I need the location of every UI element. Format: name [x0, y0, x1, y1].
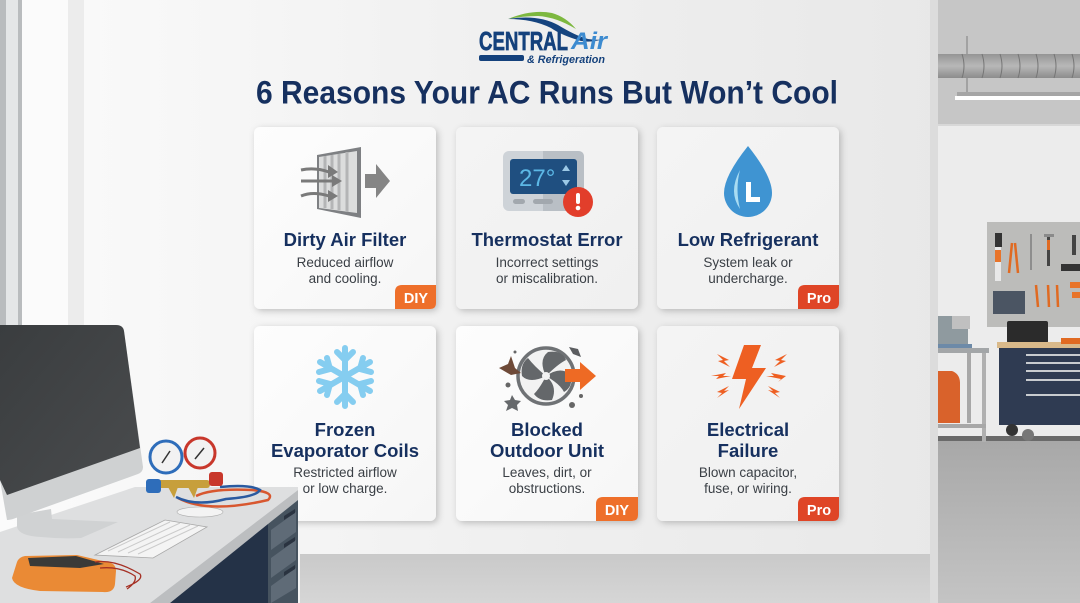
heading: Electrical: [707, 419, 789, 440]
monitor stand: [17, 509, 118, 538]
card: Blocked Outdoor Unit: [456, 326, 638, 521]
tag: Pro: [798, 497, 839, 521]
heading: Blocked: [511, 419, 583, 440]
heading: Outdoor Unit: [490, 440, 604, 461]
heading: Dirty Air Filter: [284, 229, 406, 250]
background: garage room: [938, 0, 1080, 603]
card: Dirty Air Filter: [254, 127, 436, 309]
toolbox: [1007, 321, 1048, 343]
tag: DIY: DIY: [404, 291, 428, 307]
description: System leak or: [703, 255, 793, 270]
heading: Thermostat Error: [471, 229, 623, 250]
description: or miscalibration.: [496, 271, 598, 286]
tool cabinet: [997, 338, 1080, 441]
card: Thermostat Error: [456, 127, 638, 309]
description: undercharge.: [708, 271, 788, 286]
heading: Low Refrigerant: [678, 229, 818, 250]
tag: Pro: Pro: [807, 291, 831, 307]
description: fuse, or wiring.: [704, 481, 792, 496]
pegboard with tools: [987, 222, 1080, 327]
metal shelf with orange tank: [938, 316, 989, 442]
logo: [479, 12, 609, 66]
tag: Pro: Pro: [807, 503, 831, 519]
icon: snowflake: [319, 348, 371, 406]
description: Reduced airflow: [297, 255, 393, 270]
card: Low Refrigerant: [657, 127, 839, 309]
tag: DIY: DIY: [605, 503, 629, 519]
logo: & Refrigeration: [527, 54, 605, 66]
background: window at left: [0, 0, 84, 330]
manifold gauges: [146, 438, 270, 507]
logo: Air: [570, 28, 609, 55]
description: Restricted airflow: [293, 465, 397, 480]
description: obstructions.: [509, 481, 585, 496]
icon: fan with debris: [499, 347, 596, 411]
title: 6 Reasons Your AC Runs But Won’t Cool: [256, 74, 838, 110]
tag: DIY: [395, 285, 436, 309]
description: Incorrect settings: [496, 255, 598, 270]
card: Electrical Failure: [657, 326, 839, 521]
wall end edge: [930, 0, 938, 603]
icon: thermostat: [503, 151, 593, 217]
description: Leaves, dirt, or: [502, 465, 592, 480]
logo: CENTRAL: [479, 26, 568, 56]
description: and cooling.: [309, 271, 381, 286]
description: Blown capacitor,: [699, 465, 797, 480]
heading: Failure: [718, 440, 778, 461]
icon: lightning bolt: [711, 345, 787, 409]
tag: DIY: [596, 497, 638, 521]
description: or low charge.: [303, 481, 387, 496]
background: floor: [300, 554, 938, 603]
multimeter: [12, 555, 141, 592]
icon: thermostat: 27°: [519, 165, 555, 192]
desk: [0, 487, 298, 603]
card: Frozen Evaporator Coils: [254, 326, 436, 521]
heading: Evaporator Coils: [271, 440, 419, 461]
mouse: [177, 507, 223, 517]
heading: Frozen: [315, 419, 375, 440]
computer monitor: [0, 325, 143, 538]
icon: droplet: [724, 146, 772, 217]
keyboard: [95, 520, 207, 558]
tag: Pro: [798, 285, 839, 309]
icon: air filter: [301, 147, 390, 218]
